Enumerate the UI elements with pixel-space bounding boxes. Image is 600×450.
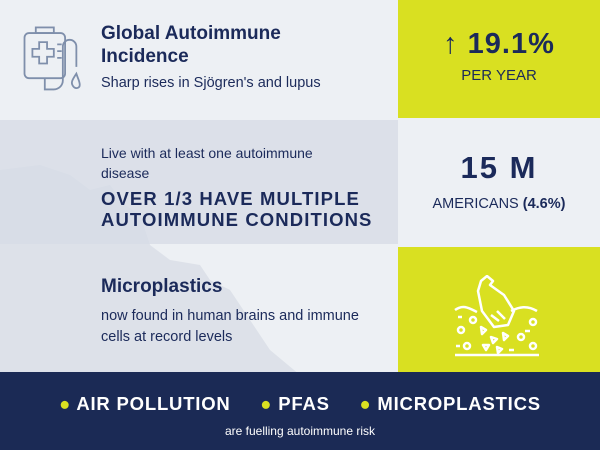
heading: global incidence: Global Autoimmune Incidence	[101, 23, 281, 67]
footer band	[0, 372, 600, 450]
footer: subtext: are fuelling autoimmune risk	[225, 424, 375, 438]
stat: 15 M	[461, 150, 537, 185]
panel: microplastics icon	[398, 247, 600, 372]
heading: microplastics: Microplastics	[101, 276, 222, 297]
stat: ↑ 19.1%	[443, 28, 555, 60]
label: AMERICANS (4.6%)	[433, 196, 565, 212]
icon: bottle in soil	[454, 275, 539, 356]
text: microplastics: now found in human brains and immune cells at record levels	[101, 308, 359, 345]
map background	[0, 244, 296, 372]
heading: over 1/3: OVER 1/3 HAVE MULTIPLE	[101, 188, 360, 209]
panel: row 2 band	[0, 120, 398, 244]
panel: 19.1%	[398, 0, 600, 118]
text: sjogren: Sharp rises in Sjögren's and lupus	[101, 75, 321, 91]
footer: risk list: ● AIR POLLUTION ● PFAS ● MICROPLASTICS	[59, 393, 541, 414]
icon: IV bag	[24, 26, 81, 90]
panel: 15 M	[432, 150, 565, 212]
heading: over 1/3: AUTOIMMUNE CONDITIONS	[101, 209, 372, 230]
text: live with: Live with at least one autoimmune disease	[101, 145, 313, 181]
label: PER YEAR	[461, 67, 537, 84]
heading: over 1/3	[101, 188, 372, 230]
